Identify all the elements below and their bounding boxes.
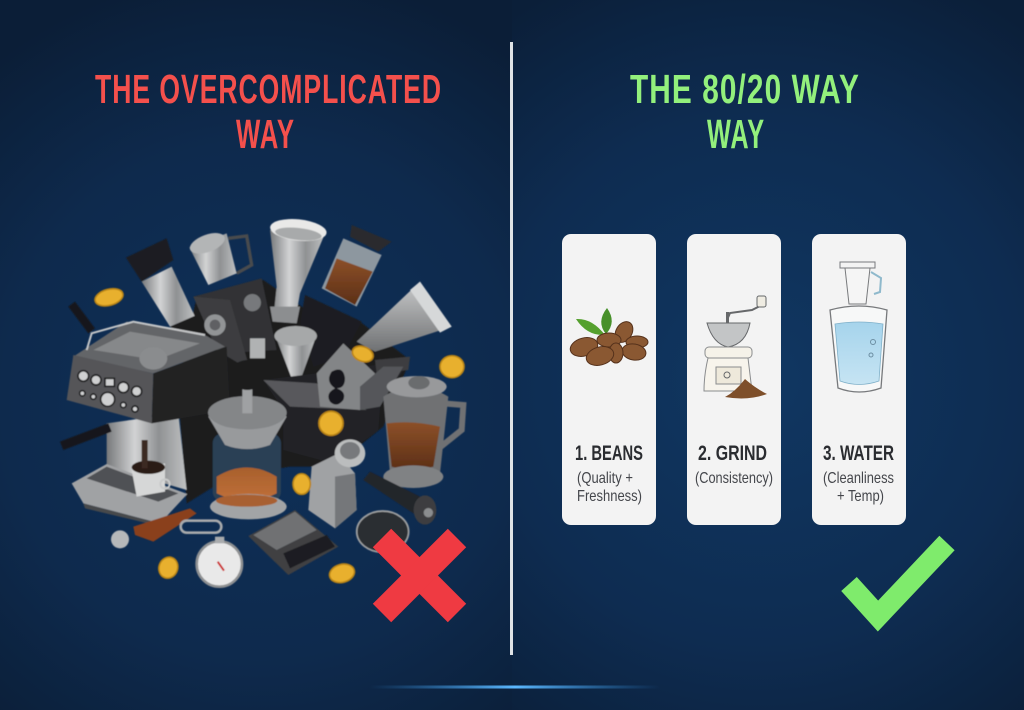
central funnel xyxy=(250,326,317,378)
icon: green check mark xyxy=(849,543,947,616)
tall steel cup xyxy=(269,216,328,323)
machine front panel xyxy=(67,355,153,423)
icon: red cross xyxy=(382,538,457,613)
card: grind xyxy=(687,234,781,525)
pour-over carafe with grounds xyxy=(208,360,287,519)
dark backing mass xyxy=(180,280,410,503)
label: 2. grind: 2. GRIND xyxy=(698,442,767,465)
grinder with dials xyxy=(187,229,277,370)
card: beans xyxy=(562,234,656,525)
gold coins xyxy=(93,286,464,585)
carabiner xyxy=(181,521,221,533)
heading: the overcomplicated way: THE OVERCOMPLICATED xyxy=(95,66,442,112)
dumbbell tamper xyxy=(363,472,436,525)
icon: filter over water glass xyxy=(830,262,887,392)
drip tray xyxy=(72,464,187,523)
machine top plate xyxy=(73,322,225,373)
kitchen scale xyxy=(248,510,338,575)
small box grinder xyxy=(308,439,365,528)
machine buttons xyxy=(78,371,142,412)
label: cleanliness plus temp xyxy=(823,470,894,505)
machine side panel xyxy=(152,347,230,423)
small gear xyxy=(111,530,129,548)
heading: the 80/20 way: THE 80/20 WAY xyxy=(630,66,860,112)
machine lower dark side xyxy=(180,397,230,503)
machine silver column xyxy=(107,413,187,490)
silver cone tilted xyxy=(357,282,452,352)
center divider xyxy=(510,42,513,655)
card: water xyxy=(812,234,906,525)
label: quality plus freshness: (Quality + xyxy=(577,470,633,487)
heading: the 80/20 way xyxy=(630,66,860,157)
stopwatch xyxy=(197,537,242,587)
glass jar with coffee xyxy=(322,225,392,307)
cup on top xyxy=(139,347,167,370)
label: 3. water: 3. WATER xyxy=(823,442,894,465)
icon: coffee beans xyxy=(568,308,648,368)
illustration: pile of coffee gear xyxy=(60,216,464,587)
icon: coffee grinder xyxy=(704,296,767,398)
steam wand handle xyxy=(60,423,112,450)
machine handle xyxy=(68,302,95,333)
scale base machine with number block xyxy=(263,343,410,463)
round tamper disc xyxy=(357,511,409,552)
french press xyxy=(383,376,463,488)
background right xyxy=(512,0,1024,710)
label: quality plus freshness xyxy=(577,470,642,505)
label: 1. beans: 1. BEANS xyxy=(575,442,643,465)
espresso machine xyxy=(60,302,230,527)
background left xyxy=(0,0,512,710)
label: cleanliness plus temp: (Cleanliness xyxy=(823,470,894,487)
espresso cup xyxy=(132,440,170,497)
leather wallet xyxy=(133,508,197,542)
black brewer tube xyxy=(126,238,207,337)
label: quality plus freshness: Freshness) xyxy=(577,488,642,505)
label: cleanliness plus temp: + Temp) xyxy=(837,488,884,505)
heading: the overcomplicated way xyxy=(95,66,442,157)
heading: the 80/20 way: WAY xyxy=(707,111,765,157)
heading: the overcomplicated way: WAY xyxy=(236,111,295,157)
dark base behind jar xyxy=(300,295,362,367)
label: consistency: (Consistency) xyxy=(695,470,773,487)
bottom glow xyxy=(370,686,660,688)
